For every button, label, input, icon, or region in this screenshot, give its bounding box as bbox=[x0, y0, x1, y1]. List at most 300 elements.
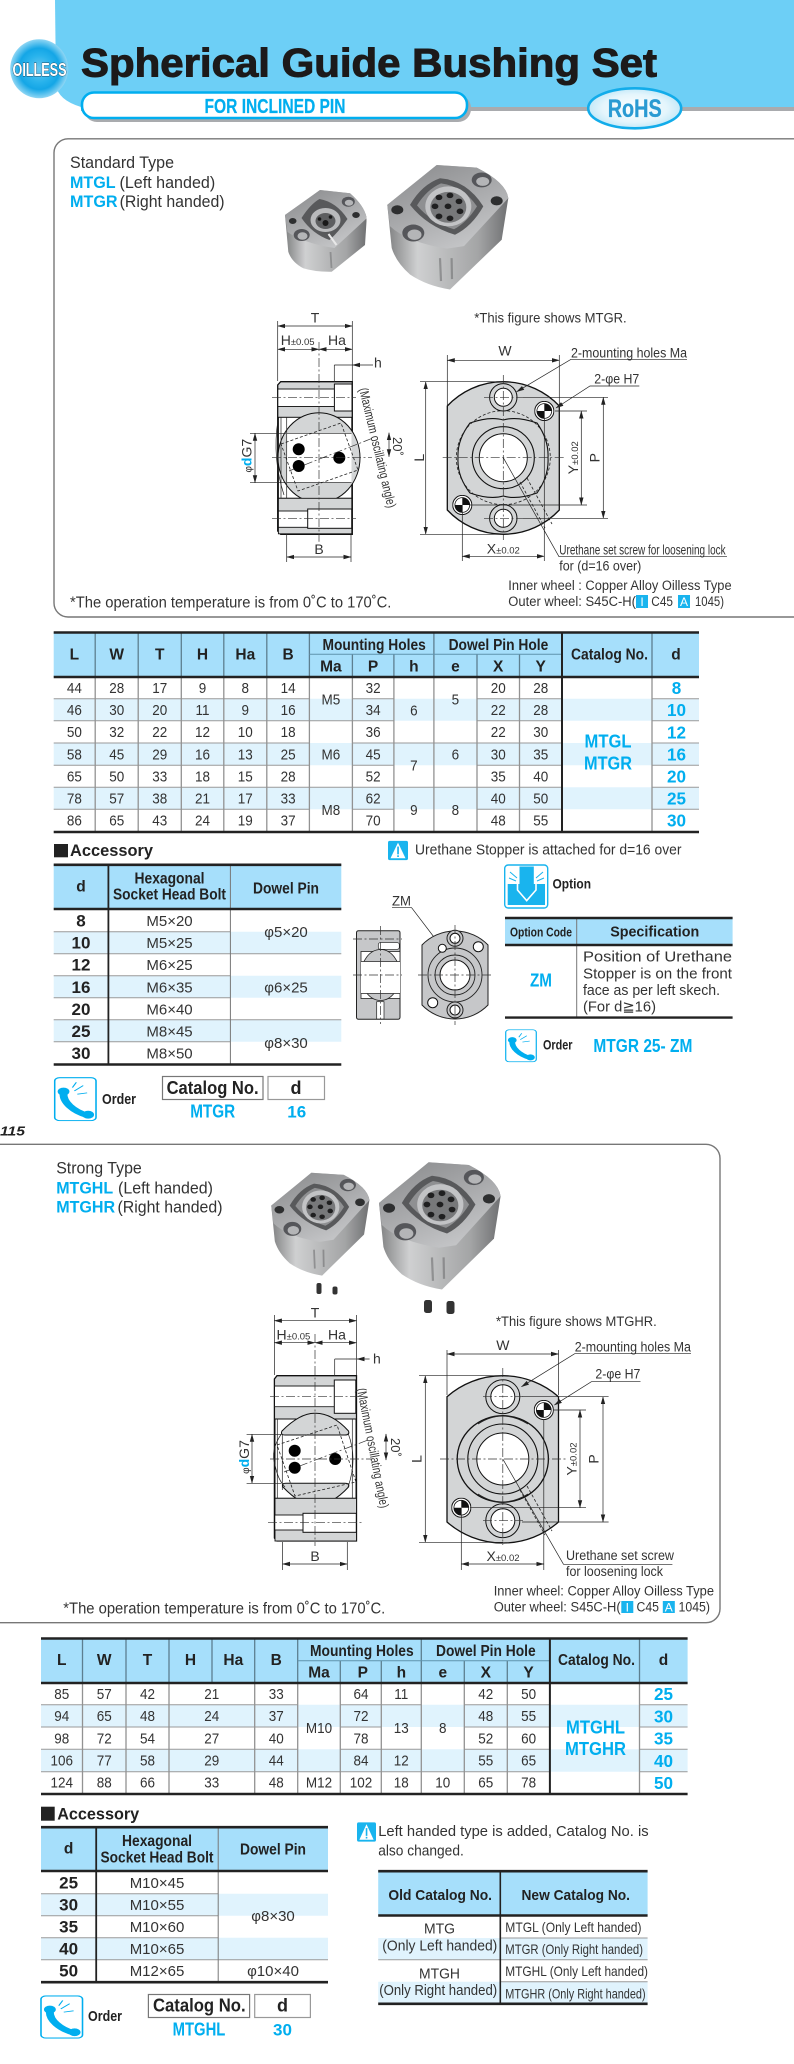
dimensions: strong side section view: φdG7 bbox=[236, 1440, 252, 1474]
order example: option: Order bbox=[543, 1037, 573, 1052]
strong material note bbox=[494, 1583, 714, 1614]
table body values: 52 bbox=[366, 768, 381, 785]
strong table header: T bbox=[143, 1652, 153, 1669]
table body values: 22 bbox=[152, 724, 167, 740]
strong material note: Outer wheel: S45C-H( bbox=[494, 1599, 621, 1614]
dimensions: side section view: (Maximum oscillating angle) bbox=[356, 386, 399, 509]
table body values: 29 bbox=[152, 746, 167, 762]
panel: strong type bbox=[0, 1144, 720, 1623]
strong accessory values: M10×60 bbox=[130, 1919, 184, 1936]
accessory values: φ6×25 bbox=[264, 979, 308, 996]
type names bbox=[70, 154, 225, 211]
table body values: 70 bbox=[366, 812, 381, 829]
option table header: Specification bbox=[610, 924, 699, 941]
strong table body values: 48 bbox=[478, 1708, 494, 1724]
dimensions: strong side section view: Ha bbox=[328, 1326, 346, 1342]
strong table body values: 78 bbox=[353, 1730, 369, 1746]
table body values: 18 bbox=[281, 724, 296, 740]
callout: strong urethane set screw: for loosening lock bbox=[566, 1564, 663, 1579]
strong table body values: 48 bbox=[140, 1708, 155, 1724]
dimensions: strong side section view bbox=[236, 1304, 403, 1570]
table body values: 35 bbox=[491, 768, 506, 785]
icon: RoHS badge bbox=[588, 88, 681, 128]
strong type names bbox=[56, 1159, 223, 1217]
table body values: 15 bbox=[238, 768, 253, 785]
order example: standard type: d bbox=[290, 1078, 302, 1098]
table header: L bbox=[70, 646, 79, 663]
strong note: operating temperature: *The operation temperature is from 0˚C to 170˚C. bbox=[63, 1600, 385, 1617]
strong table body values: 66 bbox=[140, 1774, 155, 1791]
table body values: 17 bbox=[238, 790, 253, 807]
dimensions: front view: X±0.02 bbox=[487, 540, 520, 556]
label: option: Option bbox=[552, 876, 591, 892]
dimensions: side section view: Ha bbox=[328, 332, 346, 348]
strong table body values: 102 bbox=[350, 1774, 372, 1791]
note: left handed type bbox=[357, 1823, 649, 1860]
panel: standard type bbox=[54, 139, 794, 617]
dimensions: side section view: φdG7 bbox=[238, 439, 254, 473]
callout: urethane set screw: Urethane set screw for loosening lock bbox=[559, 542, 726, 557]
option table header: Option Code bbox=[510, 925, 572, 940]
strong table body values: 33 bbox=[269, 1686, 284, 1702]
accessory values: 10 bbox=[72, 934, 90, 953]
ZM front view bbox=[418, 925, 492, 1025]
table body values: 35 bbox=[533, 746, 548, 762]
strong table header: Dowel Pin Hole bbox=[436, 1643, 536, 1660]
dimensions: side section view: T bbox=[311, 310, 320, 326]
dimensions: side section view bbox=[238, 310, 405, 562]
table body values: 46 bbox=[67, 702, 82, 718]
column d values bbox=[667, 678, 686, 831]
strong table header: Y bbox=[523, 1664, 534, 1681]
new catalog values: MTGR (Only Right handed) bbox=[505, 1941, 643, 1957]
strong catalog numbers: MTGHR bbox=[565, 1739, 626, 1759]
strong table body values: 40 bbox=[269, 1730, 284, 1746]
photo: set screws bbox=[316, 1283, 454, 1314]
strong table body values: 57 bbox=[97, 1686, 112, 1702]
catalog table header: Old Catalog No. bbox=[388, 1887, 492, 1904]
accessory values: 30 bbox=[72, 1044, 90, 1063]
callout: mounting holes: 2-mounting holes Ma bbox=[571, 346, 687, 360]
order example: strong type: d bbox=[277, 1996, 288, 2016]
strong accessory header: d bbox=[64, 1840, 73, 1857]
strong table body values: 24 bbox=[204, 1708, 220, 1724]
strong accessory header bbox=[64, 1833, 306, 1866]
strong table body values: 37 bbox=[269, 1708, 284, 1724]
dimensions: front view: L bbox=[411, 454, 427, 462]
table body values: 11 bbox=[195, 702, 210, 718]
table body values: 78 bbox=[67, 790, 82, 807]
strong table body values: 78 bbox=[521, 1774, 536, 1791]
order example: standard type: Catalog No. bbox=[167, 1078, 259, 1098]
table body values: 21 bbox=[195, 790, 210, 807]
column d values: 12 bbox=[667, 722, 686, 743]
table header: Y bbox=[536, 659, 547, 676]
old catalog values: MTG bbox=[424, 1920, 455, 1937]
icon: option bbox=[505, 865, 548, 908]
table body values: 8 bbox=[242, 680, 249, 696]
strong table body values: 98 bbox=[54, 1730, 69, 1746]
strong table body values: 77 bbox=[97, 1752, 112, 1769]
strong table body values: 10 bbox=[435, 1774, 451, 1791]
strong table header: P bbox=[358, 1664, 368, 1681]
table header: Catalog No. bbox=[571, 646, 648, 663]
strong accessory header: Hexagonal bbox=[122, 1833, 192, 1850]
table body values: 86 bbox=[67, 812, 82, 829]
table body values: 22 bbox=[491, 724, 506, 740]
order example: option bbox=[506, 1030, 692, 1062]
dimensions: side section view: h bbox=[374, 355, 382, 371]
note: left handed type: also changed. bbox=[378, 1843, 464, 1860]
dimensions: side section view: H±0.05 bbox=[281, 332, 315, 348]
material note bbox=[508, 578, 732, 609]
photo: MTGHL bushing bbox=[271, 1173, 369, 1276]
strong table body values: 48 bbox=[269, 1774, 284, 1791]
table body values: 28 bbox=[281, 768, 296, 785]
strong column d values: 40 bbox=[654, 1750, 673, 1771]
table body values: 5 bbox=[452, 691, 459, 707]
strong table body values: 124 bbox=[50, 1774, 73, 1791]
material note: C45 bbox=[651, 594, 673, 609]
table body values: 40 bbox=[491, 790, 506, 807]
table body values: 45 bbox=[366, 746, 381, 762]
table body values: 58 bbox=[67, 746, 82, 762]
table body values: 13 bbox=[238, 746, 253, 762]
old catalog values: (Only Left handed) bbox=[382, 1937, 497, 1954]
strong table body values: 65 bbox=[97, 1708, 112, 1724]
old catalog values: MTGH bbox=[419, 1965, 460, 1982]
table header: h bbox=[409, 659, 419, 676]
strong table body values: 55 bbox=[521, 1708, 536, 1724]
catalog numbers: MTGR bbox=[584, 753, 632, 773]
table body values: 7 bbox=[410, 757, 418, 774]
callout: dowel hole: 2-φe H7 bbox=[594, 371, 639, 386]
table body values: 20 bbox=[152, 702, 167, 718]
note: figure shows: *This figure shows MTGR. bbox=[474, 311, 627, 326]
strong accessory values: 25 bbox=[59, 1874, 78, 1893]
strong accessory header: Socket Head Bolt bbox=[100, 1849, 214, 1866]
callout: mounting holes bbox=[517, 346, 687, 392]
strong table body values: 72 bbox=[97, 1730, 112, 1746]
strong material note: 1045) bbox=[678, 1599, 710, 1614]
photo: large bushing bbox=[387, 165, 508, 290]
table body values: 43 bbox=[152, 812, 167, 829]
dimensions: strong front view: X±0.02 bbox=[486, 1548, 520, 1564]
column d values: 30 bbox=[667, 810, 686, 831]
catalog table header: New Catalog No. bbox=[522, 1887, 630, 1904]
strong catalog numbers bbox=[565, 1717, 626, 1759]
strong table body values: 52 bbox=[478, 1730, 494, 1746]
accessory header: d bbox=[76, 879, 86, 896]
ZM leader label: ZM bbox=[392, 892, 411, 908]
strong table body values bbox=[50, 1686, 536, 1791]
table body values: 16 bbox=[195, 746, 210, 762]
new catalog values bbox=[505, 1919, 648, 2001]
accessory table: standard type bbox=[54, 864, 341, 1064]
strong table body values: 65 bbox=[478, 1774, 494, 1791]
table body values: 40 bbox=[533, 768, 548, 785]
callout: urethane set screw bbox=[503, 458, 727, 574]
accessory values: M6×35 bbox=[146, 979, 193, 996]
heading: strong accessory: Accessory bbox=[57, 1805, 140, 1823]
table header: P bbox=[368, 659, 378, 676]
strong table body values: 54 bbox=[140, 1730, 155, 1746]
drawing: front view bbox=[443, 375, 564, 540]
note: operating temperature: *The operation temperature is from 0˚C to 170˚C. bbox=[70, 594, 391, 611]
table body values: 36 bbox=[366, 724, 381, 740]
strong column d values: 50 bbox=[654, 1773, 673, 1793]
table body values: 55 bbox=[533, 812, 548, 829]
type names: (Left handed) bbox=[120, 174, 215, 192]
callout: strong dowel hole bbox=[554, 1366, 640, 1405]
strong table header: W bbox=[97, 1652, 112, 1669]
strong type names: MTGHR bbox=[56, 1199, 115, 1217]
strong table header: Ha bbox=[223, 1652, 244, 1669]
table body values: 30 bbox=[109, 702, 124, 718]
strong table body values: 60 bbox=[521, 1730, 536, 1746]
table header: X bbox=[493, 659, 504, 676]
dimensions: front view: P bbox=[586, 453, 602, 462]
strong table body values: 21 bbox=[204, 1686, 220, 1702]
table body values: 18 bbox=[195, 768, 210, 785]
accessory header bbox=[76, 870, 319, 903]
new catalog values: MTGHL (Only Left handed) bbox=[505, 1963, 648, 1979]
strong type names: Strong Type bbox=[56, 1159, 142, 1177]
icon: RoHS badge: RoHS bbox=[608, 95, 662, 123]
accessory values: M6×40 bbox=[146, 1001, 193, 1018]
page number: 115 bbox=[0, 1123, 26, 1138]
note: left handed type: Left handed type is added, Catalog No. is bbox=[378, 1823, 649, 1840]
order example: option: MTGR 25- ZM bbox=[593, 1036, 692, 1056]
strong accessory values: 50 bbox=[59, 1962, 78, 1981]
strong table body values: 94 bbox=[54, 1708, 69, 1724]
strong table header: H bbox=[185, 1652, 196, 1669]
strong column d values: 35 bbox=[654, 1728, 673, 1749]
order example: strong type bbox=[41, 1994, 310, 2040]
table body values: 45 bbox=[109, 746, 124, 762]
material note: Inner wheel : Copper Alloy Oilless Type bbox=[508, 578, 732, 593]
table body values: 50 bbox=[67, 724, 82, 740]
table body values: 62 bbox=[366, 790, 381, 807]
dimensions: strong side section view: H±0.05 bbox=[276, 1326, 310, 1342]
table body values: 28 bbox=[109, 680, 124, 696]
column d values: 8 bbox=[672, 678, 681, 698]
strong table header bbox=[57, 1643, 668, 1681]
strong table body values: M10 bbox=[306, 1720, 332, 1736]
accessory values: 16 bbox=[72, 978, 90, 997]
material note: 1045) bbox=[695, 594, 724, 609]
accessory header: Dowel Pin bbox=[253, 880, 319, 897]
option code: ZM bbox=[530, 971, 552, 991]
table body values: 16 bbox=[281, 702, 296, 718]
dimensions: side section view: 20˚ bbox=[390, 437, 405, 456]
table body values: 57 bbox=[109, 790, 124, 807]
table body values: 14 bbox=[281, 680, 296, 696]
strong table header: Ma bbox=[308, 1664, 330, 1681]
strong table header: X bbox=[481, 1664, 492, 1681]
table body values: 25 bbox=[281, 746, 296, 762]
catalog numbers bbox=[584, 731, 632, 773]
strong type names: MTGHL bbox=[56, 1179, 113, 1197]
order example: standard type: Order bbox=[102, 1091, 136, 1108]
option specification text: Position of Urethane bbox=[583, 950, 732, 966]
table body values: 50 bbox=[109, 768, 124, 785]
table body values: 50 bbox=[533, 790, 548, 807]
table body values: M5 bbox=[322, 691, 340, 707]
spec table: standard type bbox=[54, 632, 699, 832]
accessory table: strong type bbox=[41, 1827, 328, 1982]
type names: (Right handed) bbox=[120, 193, 225, 211]
strong table body values: 50 bbox=[521, 1686, 536, 1702]
strong table body values: 72 bbox=[353, 1708, 369, 1724]
strong type names: (Right handed) bbox=[118, 1199, 222, 1217]
callout: urethane set screw: for (d=16 over) bbox=[559, 559, 641, 574]
strong table body values: 29 bbox=[204, 1752, 220, 1769]
dimensions: strong front view bbox=[408, 1337, 609, 1570]
type names: Standard Type bbox=[70, 154, 174, 172]
accessory values: 20 bbox=[72, 1000, 90, 1019]
catalog table header bbox=[388, 1887, 630, 1904]
strong accessory header: Dowel Pin bbox=[240, 1841, 306, 1858]
order example: standard type bbox=[55, 1076, 325, 1122]
table body values: 20 bbox=[491, 680, 506, 696]
dimensions: front view: W bbox=[498, 343, 512, 359]
table body values: 9 bbox=[410, 802, 418, 818]
dimensions: side section view: B bbox=[314, 541, 324, 557]
accessory values bbox=[72, 912, 308, 1063]
table body values bbox=[67, 680, 548, 829]
callout: strong mounting holes bbox=[522, 1339, 691, 1387]
dimensions: strong front view: W bbox=[496, 1337, 510, 1353]
table body values: 22 bbox=[491, 702, 506, 718]
table body values: 48 bbox=[491, 812, 506, 829]
strong material note: C45 bbox=[636, 1599, 659, 1614]
accessory values: φ8×30 bbox=[264, 1035, 308, 1052]
icon: oilless badge bbox=[10, 39, 68, 98]
strong accessory values: M10×45 bbox=[130, 1875, 184, 1892]
table body values: 8 bbox=[452, 802, 459, 818]
table body values: 12 bbox=[195, 724, 210, 740]
subtitle pill bbox=[82, 92, 471, 122]
table body values: 33 bbox=[152, 768, 167, 785]
table body values: 30 bbox=[491, 746, 506, 762]
strong accessory values: 30 bbox=[59, 1896, 78, 1915]
table body values: 38 bbox=[152, 790, 167, 807]
table body values: 34 bbox=[366, 702, 381, 718]
dimensions: strong front view: P bbox=[586, 1454, 602, 1464]
order example: strong type: 30 bbox=[273, 2021, 292, 2040]
option specification text: face as per left skech. bbox=[583, 983, 720, 999]
strong table body values: 42 bbox=[478, 1686, 494, 1702]
dimensions: strong side section view: T bbox=[311, 1304, 320, 1320]
dimensions: strong side section view: h bbox=[373, 1350, 381, 1366]
table body values: 33 bbox=[281, 790, 296, 807]
spec table: strong type bbox=[41, 1638, 688, 1794]
dimensions: front view bbox=[411, 343, 608, 561]
material note: I bbox=[640, 595, 644, 609]
table body values: 9 bbox=[199, 680, 206, 696]
accessory values: M8×45 bbox=[146, 1023, 193, 1040]
accessory values: M5×25 bbox=[146, 935, 193, 952]
ZM side view bbox=[353, 926, 402, 1024]
title: Spherical Guide Bushing Set bbox=[81, 42, 657, 86]
table body values: 32 bbox=[109, 724, 124, 740]
drawing: side section view bbox=[272, 342, 373, 542]
option specification text: (For d≧16) bbox=[583, 1000, 656, 1016]
strong table body values: 88 bbox=[97, 1774, 112, 1791]
column d values: 10 bbox=[667, 700, 686, 720]
table body values: 65 bbox=[109, 812, 124, 829]
strong table body values: 33 bbox=[204, 1774, 220, 1791]
type names: MTGL bbox=[70, 174, 116, 192]
order example: strong type: Order bbox=[88, 2008, 122, 2025]
accessory values: 12 bbox=[72, 956, 90, 975]
table body values: 17 bbox=[152, 680, 167, 696]
callout: strong urethane set screw bbox=[503, 1459, 674, 1579]
strong accessory values: M12×65 bbox=[130, 1963, 184, 1980]
new catalog values: MTGHR (Only Right handed) bbox=[505, 1985, 646, 2001]
table body values: 6 bbox=[410, 702, 418, 719]
option specification table bbox=[505, 917, 733, 1018]
material note: A bbox=[680, 595, 688, 609]
table header: Dowel Pin Hole bbox=[449, 637, 549, 654]
order example: standard type: MTGR bbox=[190, 1102, 235, 1122]
table body values: 44 bbox=[67, 680, 82, 696]
heading: accessory: Accessory bbox=[70, 842, 154, 860]
strong accessory values: φ8×30 bbox=[251, 1908, 295, 1925]
drawing: strong front view bbox=[440, 1368, 566, 1545]
option table header bbox=[510, 924, 699, 941]
table header: Ha bbox=[235, 646, 256, 663]
new catalog values: MTGL (Only Left handed) bbox=[505, 1919, 642, 1935]
table header: W bbox=[109, 646, 124, 663]
table header: H bbox=[197, 646, 208, 663]
strong table body values: 11 bbox=[394, 1686, 408, 1702]
catalog numbers: MTGL bbox=[584, 731, 632, 751]
accessory values: M6×25 bbox=[146, 957, 193, 974]
order example: strong type: Catalog No. bbox=[153, 1996, 246, 2016]
accessory header: Socket Head Bolt bbox=[113, 886, 226, 903]
strong accessory values: 40 bbox=[59, 1940, 78, 1959]
table header: Mounting Holes bbox=[322, 637, 426, 654]
table header: d bbox=[671, 646, 681, 663]
strong accessory values: φ10×40 bbox=[247, 1963, 299, 1980]
callout: strong urethane set screw: Urethane set screw bbox=[566, 1548, 674, 1563]
strong accessory values: 35 bbox=[59, 1918, 78, 1937]
table body values: 32 bbox=[366, 680, 381, 696]
table body values: 9 bbox=[242, 702, 249, 718]
strong accessory values: M10×55 bbox=[130, 1897, 184, 1914]
accessory values: 25 bbox=[72, 1022, 90, 1041]
table body values: 28 bbox=[533, 680, 548, 696]
strong column d values bbox=[654, 1684, 673, 1793]
strong column d values: 30 bbox=[654, 1706, 673, 1726]
order example: standard type: 16 bbox=[287, 1103, 306, 1122]
strong table body values: 55 bbox=[478, 1752, 494, 1769]
table body values: 65 bbox=[67, 768, 82, 785]
table header: e bbox=[451, 659, 460, 676]
strong table body values: 106 bbox=[50, 1752, 73, 1769]
strong table body values: M12 bbox=[306, 1774, 332, 1791]
old catalog values: (Only Right handed) bbox=[379, 1982, 497, 1999]
dimensions: strong front view: Y±0.02 bbox=[564, 1442, 580, 1476]
strong accessory values bbox=[59, 1874, 299, 1981]
option specification text bbox=[583, 950, 732, 1016]
strong material note: Inner wheel: Copper Alloy Oilless Type bbox=[494, 1583, 714, 1598]
strong material note: A bbox=[665, 1600, 673, 1614]
callout: dowel hole bbox=[556, 371, 639, 408]
table body values: M8 bbox=[322, 802, 340, 818]
